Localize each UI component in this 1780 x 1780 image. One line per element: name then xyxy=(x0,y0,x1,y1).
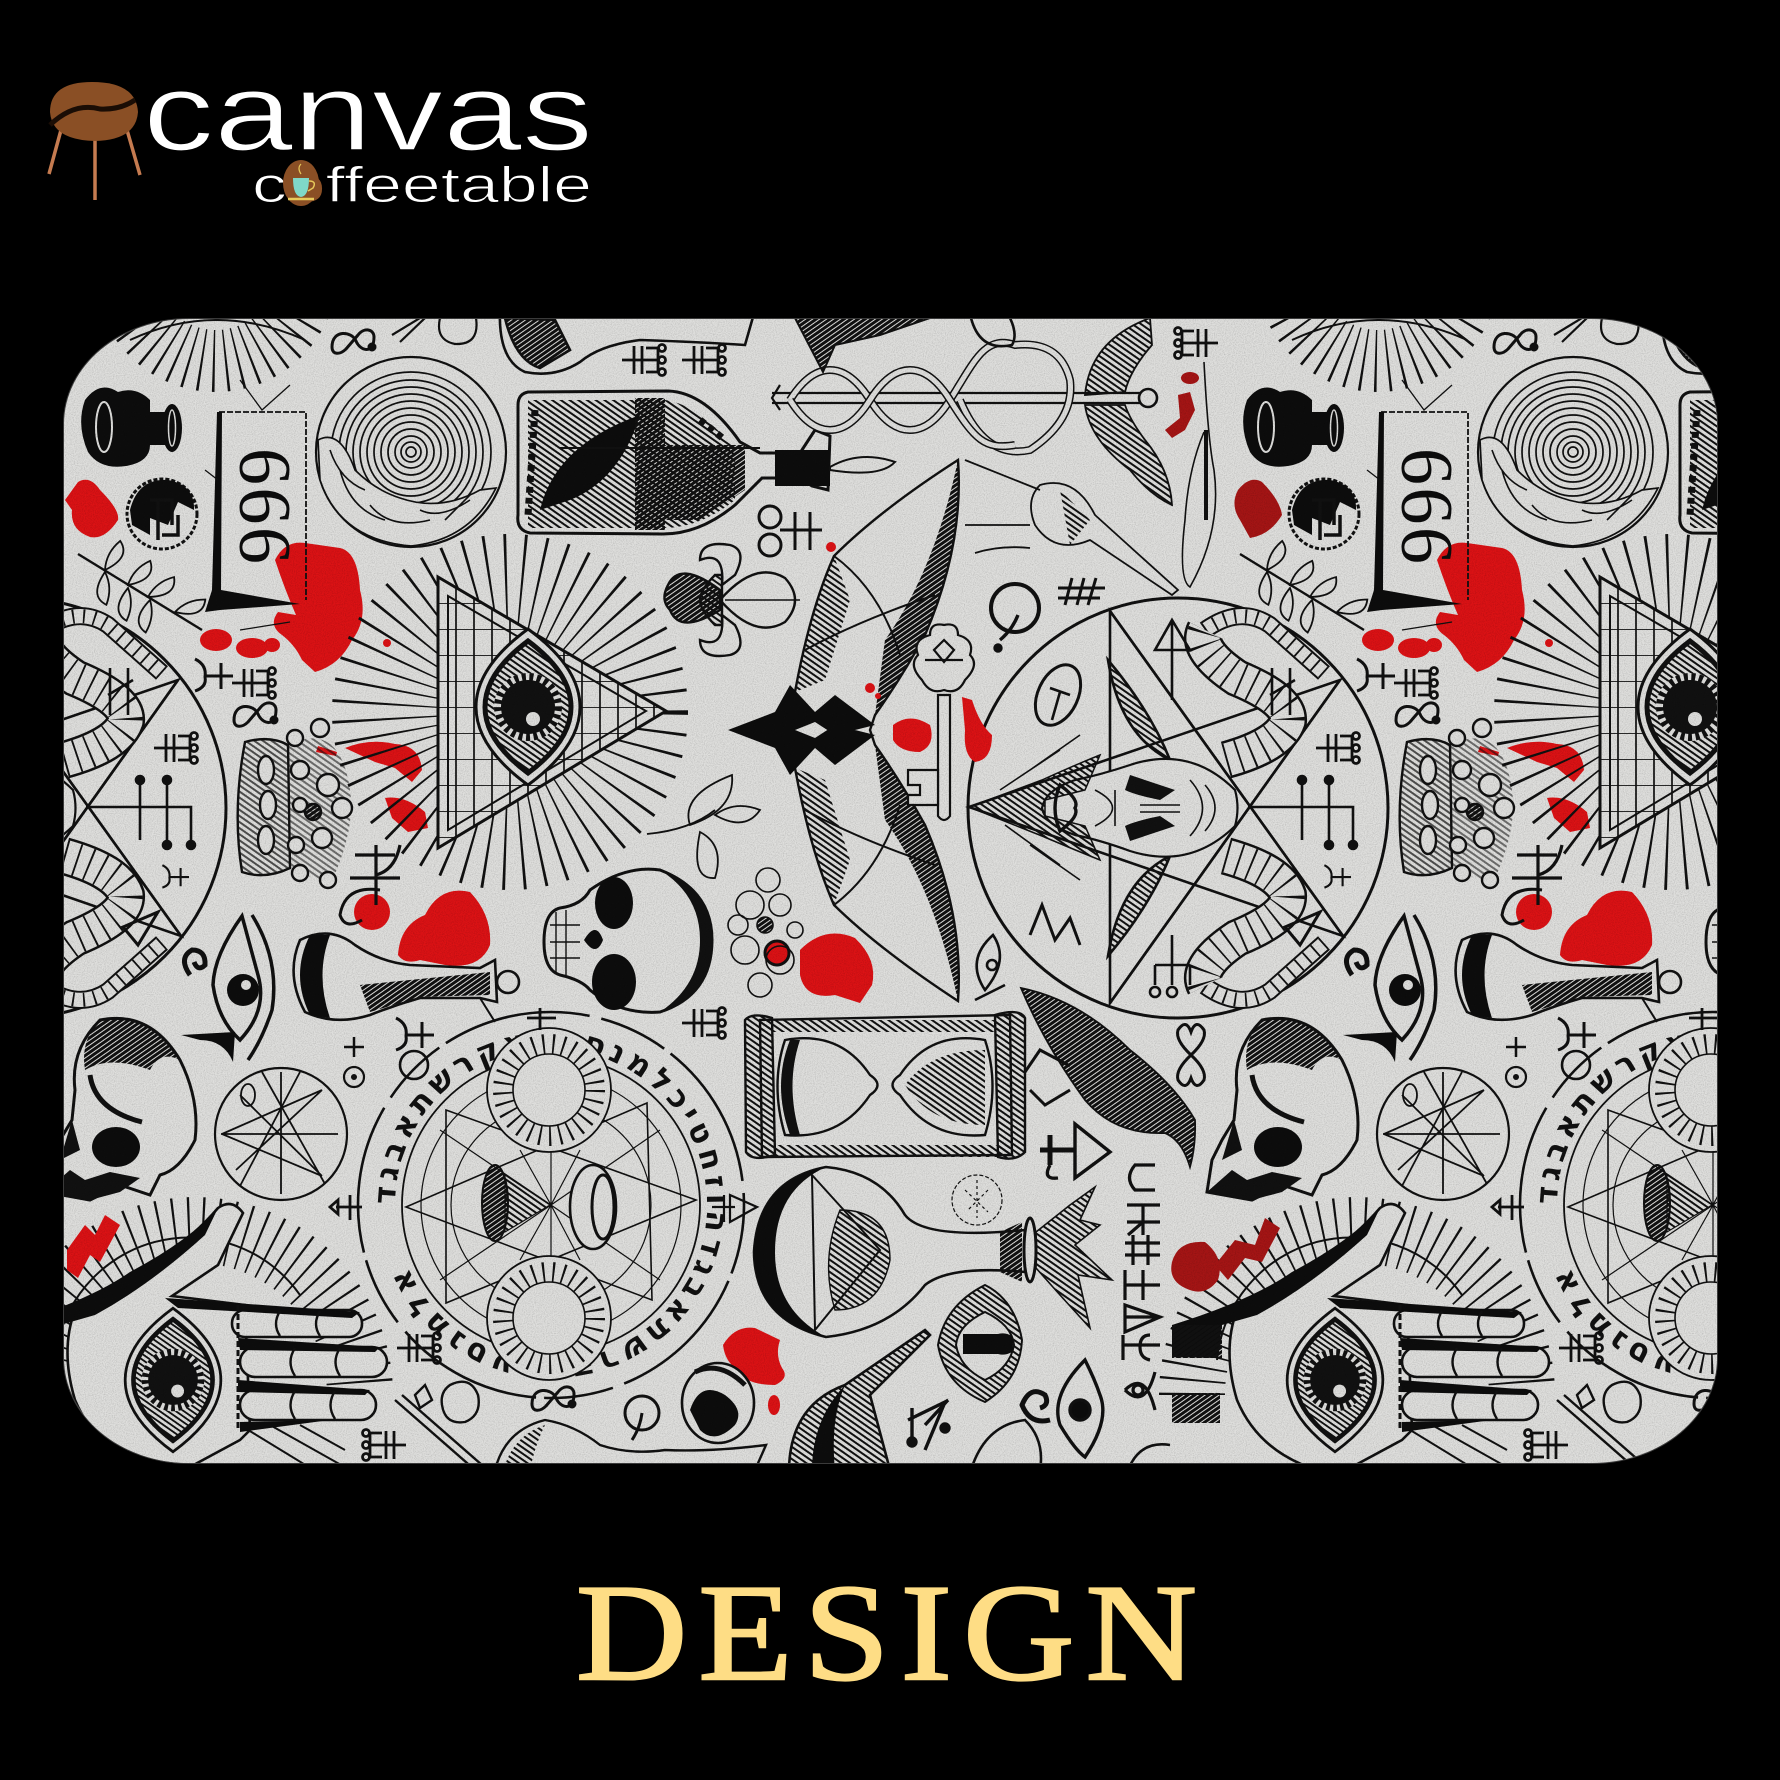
icon: leaf sprig xyxy=(647,775,760,878)
icon: caduceus wings xyxy=(1085,318,1172,505)
panel: 666 tablet: 666 xyxy=(223,448,305,564)
icon: small sigils by big circle xyxy=(344,1008,726,1087)
motif column repeated at right xyxy=(1172,179,1780,1480)
icon: fleur de lis xyxy=(664,544,800,656)
circle and star xyxy=(968,598,1388,1018)
goat face and beard xyxy=(969,735,1238,880)
icon: open hand with eye xyxy=(10,1204,387,1480)
panel: 666 tablet xyxy=(205,380,306,630)
icon: Q circle bottom xyxy=(625,1396,659,1440)
icon: music-like sigil xyxy=(908,1400,949,1450)
icon: bottle with plant xyxy=(518,391,830,534)
sunburst at top edge xyxy=(125,179,307,361)
repeating motif column xyxy=(64,319,936,1463)
icon: black ink bottle xyxy=(81,388,182,467)
red splashes xyxy=(200,488,873,1415)
icon: keyhole ornament xyxy=(938,1285,1022,1402)
icon: scroll at bottom edge xyxy=(971,1420,1170,1470)
icon: figure eight hearts xyxy=(1178,1024,1204,1086)
icon: triangle arrow sigil xyxy=(1040,1124,1110,1178)
red drops near caduceus xyxy=(1165,372,1199,438)
icons: sigils around big circle xyxy=(330,1008,757,1222)
icon: coffee cup xyxy=(283,160,319,206)
icon: small seal circle xyxy=(215,1068,347,1200)
icon: leaf branch xyxy=(78,541,207,633)
icon: trident sigil top xyxy=(1174,328,1218,358)
icon: skull with jaw left xyxy=(544,869,712,1012)
logo: canvas coffeetable xyxy=(49,51,593,213)
icon: bottle at bottom edge xyxy=(495,1420,766,1470)
icon: eye of Horus xyxy=(181,915,274,1062)
icon: pen nib xyxy=(830,457,895,473)
icon: alchemical sigil xyxy=(340,845,400,924)
icon: infinity at top xyxy=(332,330,375,353)
sigil: trident xyxy=(1324,865,1351,888)
icon: swirl eye xyxy=(1022,1360,1103,1457)
sigils inside pentagram xyxy=(1026,620,1357,997)
icon: all-seeing triangle with rays xyxy=(388,577,666,848)
icon: alchemical cross xyxy=(759,506,822,556)
panel: patterned mat xyxy=(64,319,1717,1463)
icon: feather xyxy=(1182,362,1216,587)
icon: hat-shaped vessel bottom xyxy=(789,1330,930,1470)
icon: caduceus xyxy=(772,343,1157,451)
icon: skull profile xyxy=(45,1018,196,1200)
icon: skeleton key xyxy=(908,624,974,820)
goat ears xyxy=(1108,660,1170,956)
icon: scroll at top edge xyxy=(971,318,1015,346)
icon: fish symbol xyxy=(975,935,1005,1000)
icons: small sigils by crown xyxy=(195,659,277,726)
icon: dark bird shape at top edge xyxy=(795,318,930,372)
icon: round flask xyxy=(965,460,1178,595)
wordmark: canvas: canvas xyxy=(143,51,593,174)
icon: pentagram with goat head xyxy=(968,598,1388,1018)
red blot bright on left xyxy=(65,480,120,1278)
icon: hand-drawn round flask with leaves xyxy=(754,1167,1112,1337)
icons: twin sigils at top xyxy=(622,344,726,376)
chart: big magic circle with runes: אלמנסעפצקרשתאבגדהוזחטיכלמנסעפצקרשתאבגד xyxy=(378,1034,724,1376)
icon: spiral circle xyxy=(316,357,506,547)
icon: infinity under circle xyxy=(532,1387,575,1410)
icon: bottle at top edge xyxy=(500,310,755,374)
icon: hourglass xyxy=(745,1012,1025,1159)
icon: coin xyxy=(127,479,197,549)
icon: ornament with red eye xyxy=(728,868,803,997)
wordmark: coffeetable: coffeetable xyxy=(252,157,592,213)
icon: coffee bean table xyxy=(49,82,140,200)
title: DESIGN: DESIGN xyxy=(576,1556,1208,1709)
sigil: cross xyxy=(1316,732,1360,764)
goat horns xyxy=(1203,616,1324,1000)
red drops by bat xyxy=(826,542,992,762)
icon: key at top edge xyxy=(392,318,477,344)
icon: Q symbol xyxy=(991,584,1039,651)
panel: mat edge xyxy=(63,318,1718,1464)
icon: crow xyxy=(1021,988,1195,1167)
column of symbols xyxy=(1123,1165,1160,1410)
pentagram repeated at left xyxy=(0,598,226,1018)
icon: crown xyxy=(238,719,352,888)
icon: key at bottom xyxy=(395,1382,482,1470)
icon: hash sigil xyxy=(1058,578,1105,605)
red blot dark on right xyxy=(1171,480,1282,1292)
icon: small stamp circle xyxy=(952,1175,1002,1225)
mat texture xyxy=(64,319,1717,1463)
icon: crystal ball xyxy=(682,1363,754,1443)
icon: round flask vial xyxy=(294,934,519,1022)
icon: bat xyxy=(728,460,959,1001)
icon: sigil at bottom xyxy=(362,1430,406,1460)
